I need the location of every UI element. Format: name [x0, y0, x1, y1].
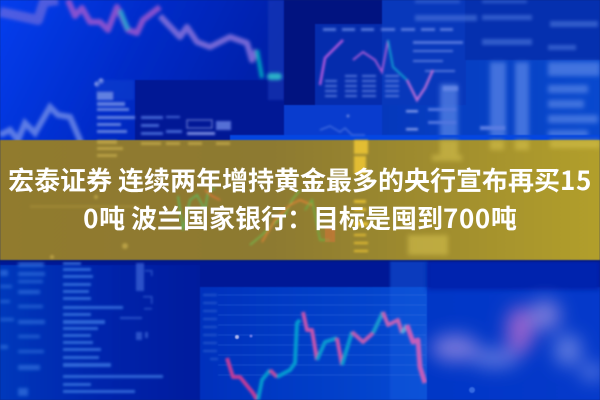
- title text: [8, 161, 592, 236]
- bottom candlestick line chart: [227, 312, 425, 400]
- bottom right blurred chart: [427, 260, 600, 400]
- top left blue panel: [0, 0, 285, 140]
- top right table chart: [320, 28, 505, 135]
- top right data panel: [382, 0, 600, 140]
- left white line chart: [0, 107, 82, 160]
- bottom left code listing panel: [0, 260, 600, 400]
- title text: 宏泰证券 连续两年增持黄金最多的央行宣布再买15: [8, 161, 592, 198]
- gold title band: [0, 140, 600, 260]
- top middle dark panel: [284, 0, 384, 140]
- top candlestick line chart: [0, 0, 282, 80]
- central data columns: [94, 78, 231, 135]
- bottom centre chart panel: [200, 260, 428, 400]
- title text: 0吨 波兰国家银行：目标是囤到700吨: [83, 199, 517, 236]
- blue strip above title band: [230, 135, 600, 140]
